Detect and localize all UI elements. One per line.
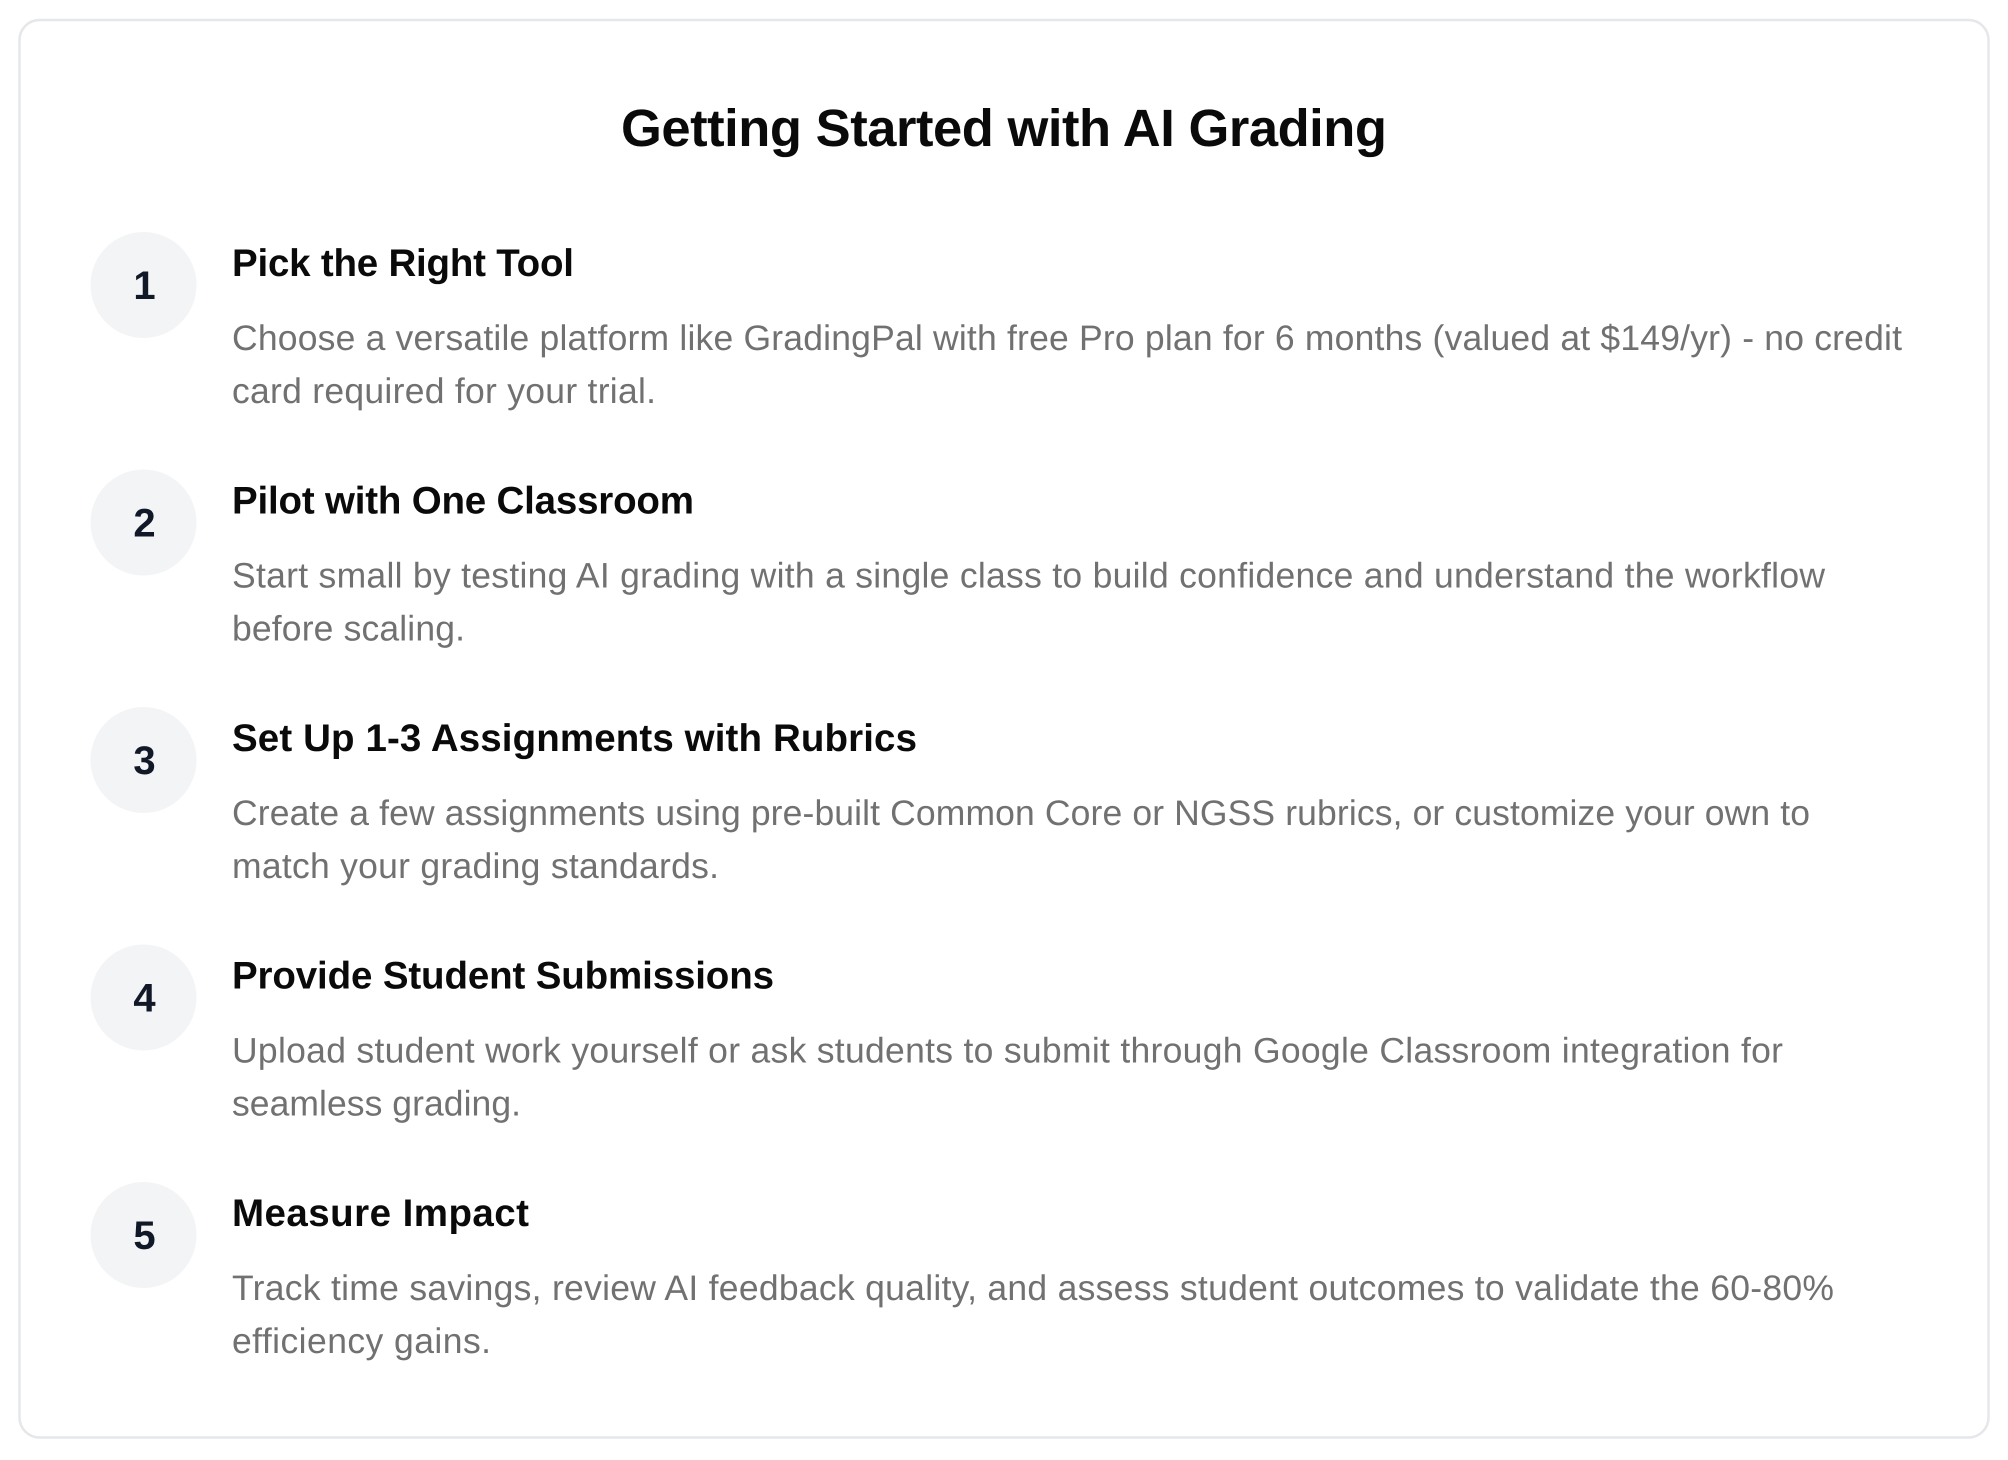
heading: step 5: Measure Impact [232,1192,529,1235]
heading: step 4: Provide Student Submissions [232,954,774,998]
icon: number badge 1 [90,232,196,338]
icon: number badge 4: 4 [133,976,156,1020]
text block: step 1 description [232,318,1902,411]
text block: step 5 description: Track time savings, review AI feedback quality, and assess student outcomes to validate the 60-80% [232,1268,1834,1308]
heading: step 1: Pick the Right Tool [232,242,574,285]
text block: step 2 description: Start small by testing AI grading with a single class to build confidence and understand the workflow [232,556,1825,596]
icon: number badge 3: 3 [133,739,156,783]
text block: step 5 description [232,1268,1834,1361]
text block: step 2 description: before scaling. [232,608,465,648]
icon: number badge 1: 1 [133,264,156,308]
step 4 [90,944,1783,1124]
step 2 [90,470,1825,648]
icon: number badge 4 [90,944,196,1050]
step 5 [90,1182,1834,1361]
icon: number badge 2: 2 [133,502,156,546]
heading: step 3: Set Up 1-3 Assignments with Rubrics [232,717,917,760]
step 3 [90,707,1810,886]
text block: step 2 description [232,556,1825,648]
text block: step 3 description: Create a few assignments using pre-built Common Core or NGSS rubrics, or customize your own to [232,793,1810,833]
text block: step 1 description: card required for your trial. [232,371,656,411]
text block: step 1 description: Choose a versatile platform like GradingPal with free Pro plan for 6 months (valued at $149/yr) - no credit [232,318,1902,358]
icon: number badge 3 [90,707,196,813]
text block: step 3 description: match your grading standards. [232,846,719,886]
heading: step 2: Pilot with One Classroom [232,480,694,522]
text block: step 3 description [232,793,1810,886]
text block: step 4 description: Upload student work yourself or ask students to submit through Google Classroom integration for [232,1030,1783,1070]
text block: step 4 description [232,1030,1783,1124]
title: Getting Started with AI Grading [621,99,1387,158]
icon: number badge 5 [90,1182,196,1288]
icon: number badge 5: 5 [133,1214,156,1258]
text block: step 4 description: seamless grading. [232,1084,521,1124]
icon: number badge 2 [90,470,196,576]
step 1 [90,232,1902,411]
text block: step 5 description: efficiency gains. [232,1321,491,1361]
